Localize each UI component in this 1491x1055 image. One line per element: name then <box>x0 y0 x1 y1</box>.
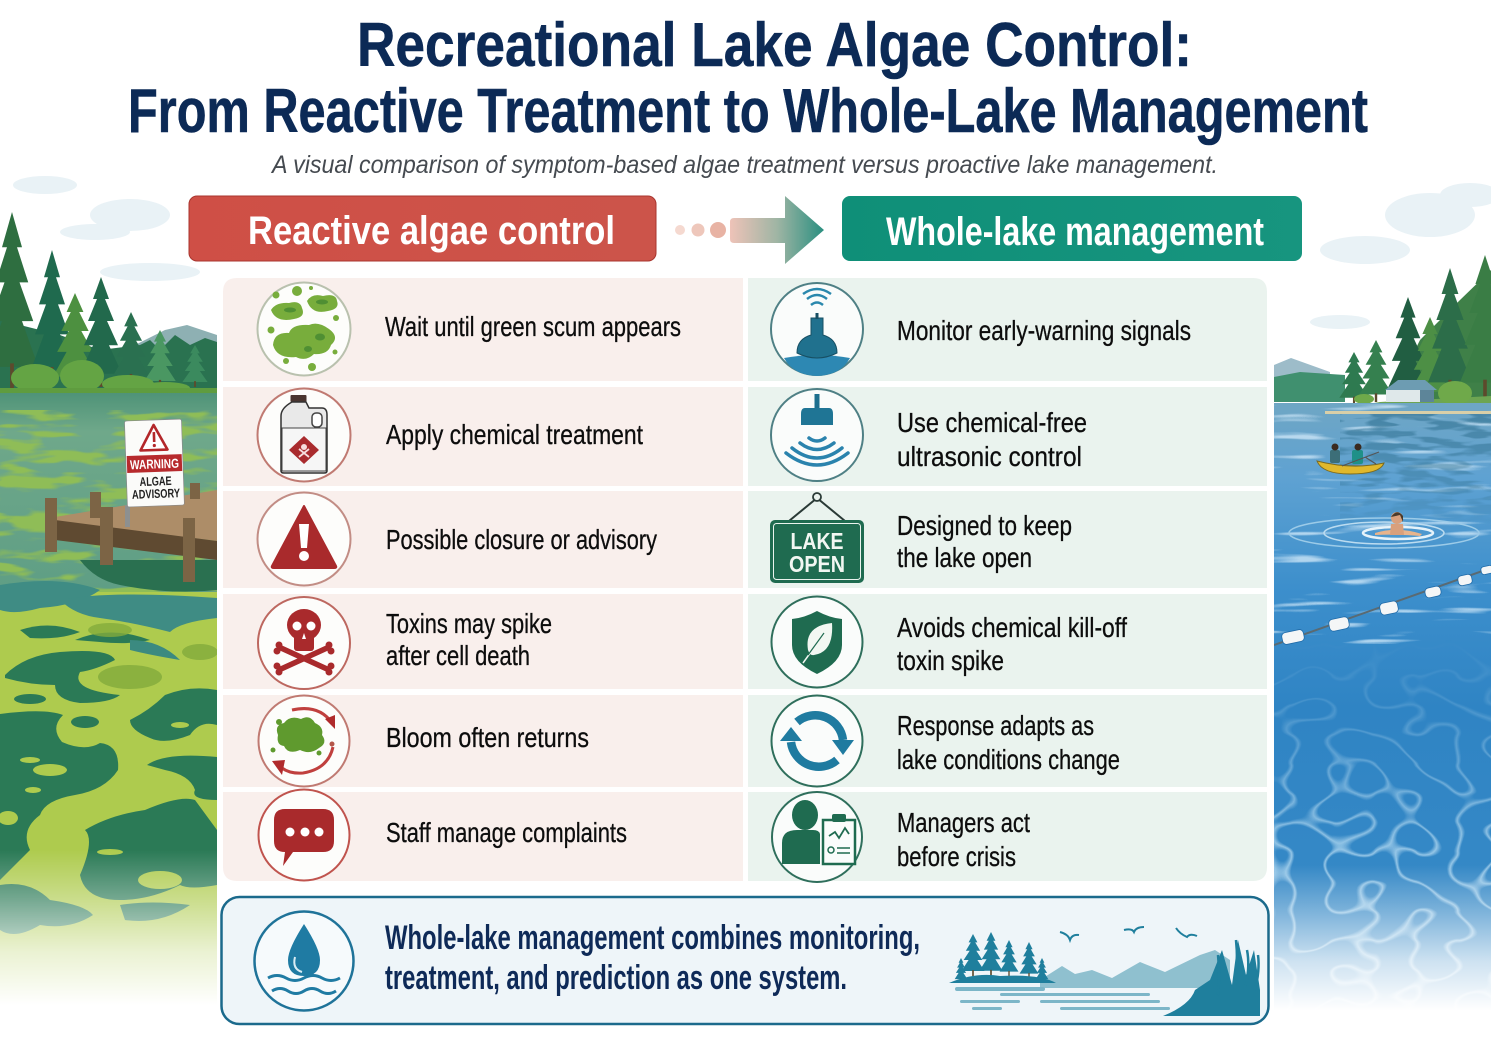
pine trees <box>1339 255 1491 404</box>
icon: shield with leaf <box>772 596 862 688</box>
label: Staff manage complaints <box>386 817 627 848</box>
buoy rope with floats <box>1274 565 1491 645</box>
row: staff manage complaints <box>223 790 743 881</box>
icon: manager with clipboard <box>772 792 862 882</box>
algae islands <box>0 722 189 889</box>
row: avoids chemical kill-off toxin spike <box>748 594 1267 689</box>
label: Designed to keep <box>897 510 1072 541</box>
back forest <box>1274 372 1345 402</box>
icon: algae scum <box>258 282 350 376</box>
header: reactive algae control: Reactive algae control <box>248 209 615 253</box>
algae covered water <box>0 393 218 1010</box>
column: reactive algae control <box>223 278 743 881</box>
fade to white <box>1274 865 1491 1020</box>
row: wait until green scum appears <box>223 278 743 381</box>
label <box>897 612 1127 676</box>
label <box>897 807 1030 872</box>
kayak with paddlers <box>1317 444 1384 474</box>
panel: right clear lake scene <box>1274 183 1491 1020</box>
icon: lake open sign <box>770 493 864 583</box>
arrow from reactive to whole-lake <box>675 196 824 264</box>
lake landscape illustration <box>949 927 1260 1016</box>
label: Managers act <box>897 807 1030 838</box>
distant mountain <box>138 325 217 346</box>
row: monitor early-warning signals <box>748 278 1267 381</box>
warning sign <box>124 419 184 507</box>
row: chemical-free ultrasonic control <box>748 387 1267 486</box>
row: designed to keep the lake open <box>748 491 1267 588</box>
header: whole-lake management <box>842 196 1302 261</box>
row: possible closure or advisory <box>223 491 743 588</box>
comparison panel <box>217 272 1273 887</box>
clouds right <box>1310 183 1491 329</box>
icon: monitoring buoy <box>771 283 863 376</box>
icon: ultrasonic device <box>771 389 863 481</box>
textured algae mats <box>88 623 218 689</box>
label: Toxins may spike <box>386 608 552 639</box>
label: lake conditions change <box>897 744 1120 775</box>
pine trees <box>0 212 208 388</box>
label: before crisis <box>897 841 1016 872</box>
clouds left <box>13 176 200 281</box>
label: Monitor early-warning signals <box>897 315 1191 346</box>
icon: water drop <box>254 912 354 1010</box>
label: after cell death <box>386 640 530 671</box>
swimmer with ripples <box>1289 512 1479 548</box>
right forest mass <box>1416 270 1491 400</box>
subtitle: A visual comparison of symptom-based algae treatment versus proactive lake management. <box>270 151 1218 179</box>
label <box>897 407 1087 472</box>
callout text <box>385 919 920 997</box>
callout text: Whole-lake management combines monitoring, <box>385 919 920 957</box>
label: Possible closure or advisory <box>386 524 657 555</box>
icon: lake open sign: LAKE <box>790 528 844 554</box>
row: toxins may spike <box>223 594 743 689</box>
row: managers act before crisis <box>748 792 1267 882</box>
column: whole-lake management <box>748 278 1267 882</box>
distant mountain <box>1274 358 1330 377</box>
fade to white <box>0 850 217 1015</box>
row: apply chemical treatment <box>223 387 743 486</box>
back forest <box>0 321 217 388</box>
water <box>1274 403 1491 1020</box>
warning sign: WARNING <box>130 456 179 472</box>
label: Wait until green scum appears <box>385 311 681 342</box>
label: the lake open <box>897 542 1032 573</box>
warning sign post <box>125 505 130 527</box>
warning sign: ADVISORY <box>132 486 181 502</box>
icon: returning bloom <box>258 696 350 786</box>
label: toxin spike <box>897 645 1004 676</box>
row: response adapts <box>748 695 1267 787</box>
label: Response adapts as <box>897 710 1094 741</box>
warning triangle <box>140 425 167 450</box>
icon: adaptive cycle <box>772 696 862 786</box>
icon: lake open sign: OPEN <box>789 551 845 577</box>
shoreline bushes <box>0 360 217 394</box>
title <box>128 11 1368 146</box>
panel: left lake scene with algae bloom <box>0 176 218 1015</box>
title: Recreational Lake Algae Control: <box>357 11 1192 80</box>
icon: chemical jug <box>258 388 350 482</box>
label <box>897 510 1072 573</box>
icon: skull and crossbones <box>258 597 350 689</box>
header: reactive algae control <box>189 196 656 261</box>
label: Use chemical-free <box>897 407 1087 438</box>
label: Avoids chemical kill-off <box>897 612 1127 643</box>
dark water blobs <box>0 625 217 934</box>
callout banner <box>222 897 1268 1024</box>
label: Bloom often returns <box>386 722 589 753</box>
icon: speech bubble <box>258 790 350 880</box>
wooden dock <box>45 483 217 582</box>
label <box>386 608 552 671</box>
open water under dock <box>0 581 100 612</box>
label <box>897 710 1120 775</box>
shore bushes <box>1354 381 1472 405</box>
row: bloom often returns <box>223 695 743 787</box>
label: ultrasonic control <box>897 441 1082 472</box>
lakeside house <box>1385 380 1437 402</box>
callout text: treatment, and prediction as one system. <box>385 959 847 997</box>
warning sign: ALGAE <box>139 474 172 489</box>
header: whole-lake management: Whole-lake management <box>886 210 1264 254</box>
label: Apply chemical treatment <box>386 419 643 450</box>
grassy shore <box>1374 396 1491 403</box>
icon: warning triangle <box>258 492 350 586</box>
